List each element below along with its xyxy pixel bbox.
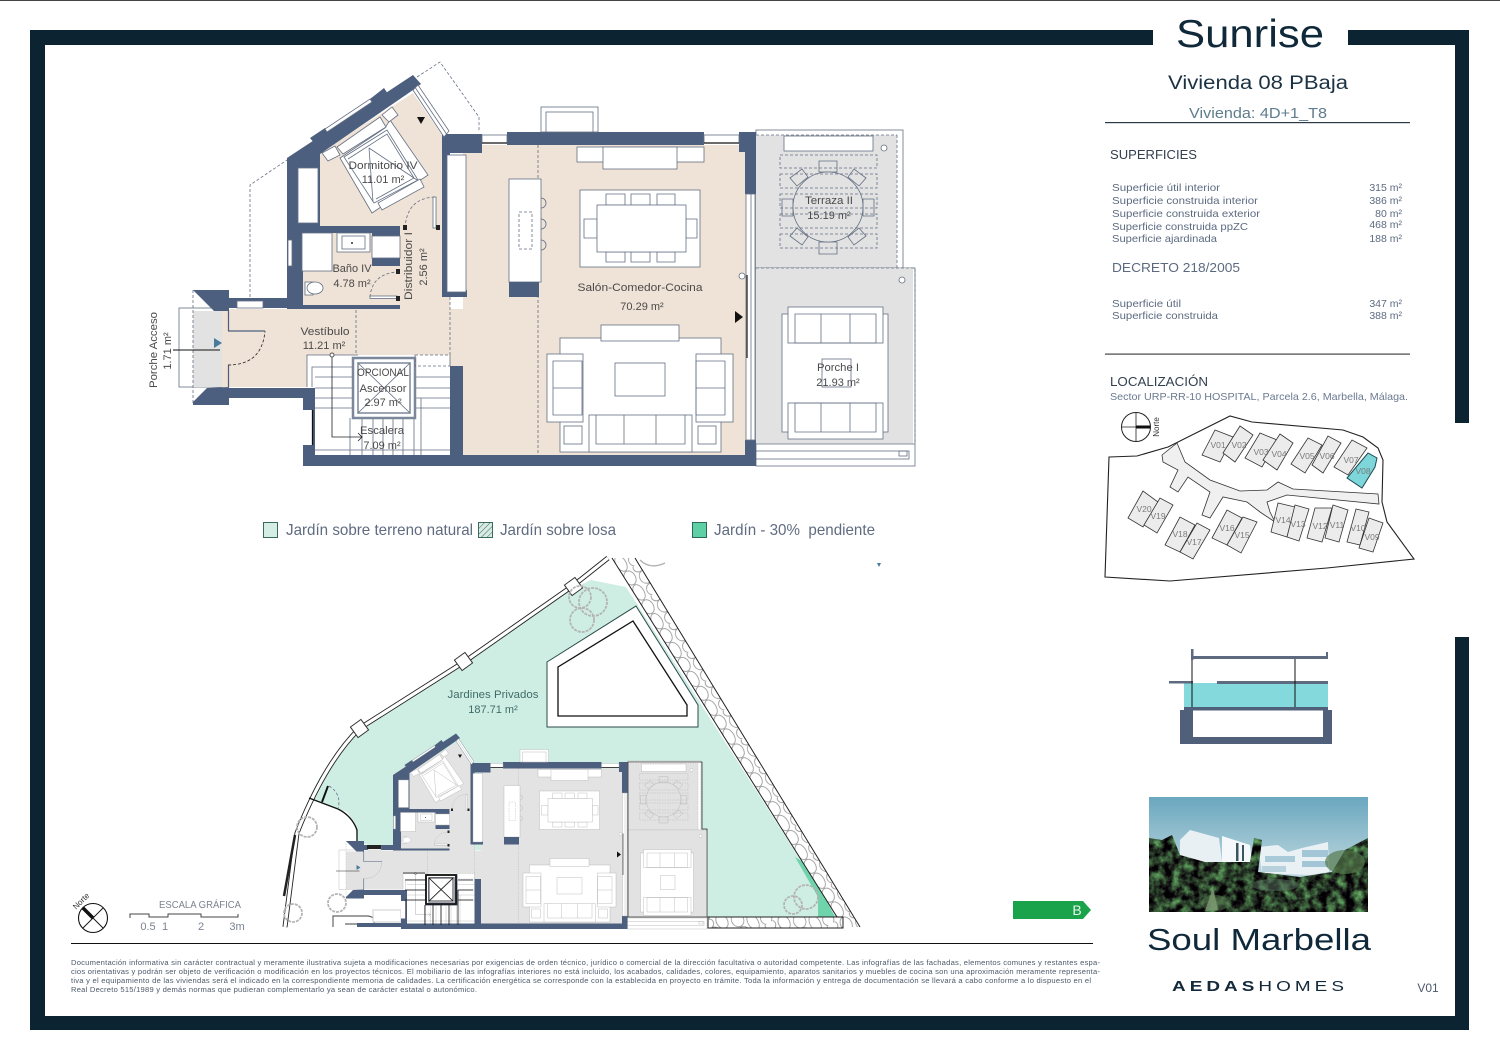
living room furniture — [547, 325, 733, 452]
bedroom bed — [322, 107, 428, 213]
row: superficie construida ppZC: Superficie construida ppZC — [1112, 221, 1248, 233]
kitchen — [509, 147, 704, 297]
heading: superficies: SUPERFICIES — [1110, 147, 1197, 162]
site labels: V08 — [1355, 466, 1371, 476]
label: escalera: 7.09 m² — [363, 440, 401, 452]
panel: localizacion text: Sector URP-RR-10 HOSPITAL, Parcela 2.6, Marbella, Málaga. — [1110, 391, 1408, 403]
label: ascensor: Ascensor — [360, 383, 407, 395]
site labels: V01 — [1210, 440, 1226, 450]
garden gate and curved path — [309, 786, 401, 927]
room labels — [148, 160, 860, 452]
site roads — [1162, 443, 1379, 522]
windows and wardrobes — [228, 85, 755, 445]
label: porche acceso: 1.71 m² — [162, 332, 174, 370]
project name: Soul Marbella: Soul Marbella — [1147, 922, 1372, 957]
label: salon comedor cocina: 70.29 m² — [620, 301, 664, 313]
stairs — [307, 353, 450, 455]
legend: jardin sobre losa: Jardín sobre losa — [500, 522, 616, 539]
label: ascensor: 2.97 m² — [364, 397, 402, 409]
graphic scale: 3m — [229, 921, 245, 933]
legal disclaimer: Documentación informativa sin carácter contractual y meramente ilustrativa sujeta a modificaciones necesarias por exigencias de orden técnico, jurídico o comercial de la dirección facultativa o autoridad competente. Las infografías de las fachadas, elementos comunes y restantes espa- — [71, 958, 1100, 967]
mini plan overlays — [357, 762, 707, 927]
graphic scale — [130, 898, 245, 933]
site labels: V10 — [1350, 523, 1366, 533]
label: porche I: Porche I — [817, 362, 859, 374]
orientation markers — [417, 117, 743, 323]
row: superficie util interior — [1112, 182, 1402, 194]
doors — [228, 197, 440, 365]
site buildings — [1128, 426, 1383, 559]
building section diagram — [1169, 649, 1332, 744]
row: superficie ajardinada — [1112, 233, 1402, 245]
label: ascensor — [357, 367, 409, 409]
perimeter wall — [284, 558, 608, 927]
row: superficie construida — [1112, 310, 1402, 322]
graphic scale: 1 — [162, 921, 168, 933]
legal disclaimer: tiva y el equipamiento de las viviendas será el indicado en la correspondiente memoria de calidades. La certificación energética se corresponde con la establecida en proyecto en trámite. Toda la información y entrega de documentación se llevará a cabo conforme a lo dispuesto en el — [71, 976, 1091, 985]
site labels: V09 — [1364, 532, 1380, 542]
label: terraza — [805, 195, 853, 222]
label: vestibulo: Vestíbulo — [300, 326, 350, 338]
label: distribuidor: 2.56 m² — [418, 248, 430, 286]
site labels: V13 — [1290, 519, 1306, 529]
site labels: V03 — [1253, 447, 1269, 457]
brand logo: AEDAS HOMES: AEDAS HOMES — [1172, 978, 1348, 995]
site labels: V12 — [1312, 521, 1328, 531]
graphic scale: ESCALA GRÁFICA — [159, 898, 241, 911]
panel: localizacion text: LOCALIZACIÓN — [1110, 374, 1208, 389]
label: terraza: Terraza II — [805, 195, 853, 207]
site location map — [1105, 412, 1414, 581]
porch furniture — [782, 307, 888, 439]
icon: north compass: Norte — [71, 891, 92, 911]
mini plan inside garden — [336, 727, 707, 929]
row: superficie construida exterior: Superficie construida exterior — [1112, 208, 1261, 220]
label: jardines privados: 187.71 m² — [468, 704, 518, 716]
garden trees — [284, 560, 818, 922]
row: superficie util — [1112, 298, 1402, 310]
row: superficie util: Superficie útil — [1112, 298, 1181, 310]
site boundary — [1105, 416, 1414, 581]
panel: superficies — [1110, 147, 1402, 322]
label: bano: 4.78 m² — [333, 278, 371, 290]
label: distribuidor — [403, 232, 430, 300]
energy rating arrow — [1013, 901, 1091, 919]
site labels: V07 — [1343, 455, 1359, 465]
walls — [193, 75, 756, 466]
photo palms — [1201, 850, 1365, 911]
site labels: V15 — [1234, 530, 1250, 540]
label: jardines privados — [448, 689, 539, 716]
small marker — [877, 563, 881, 567]
label: dormitorio: Dormitorio IV — [348, 160, 418, 172]
site labels: V02 — [1231, 440, 1247, 450]
row: superficie construida exterior — [1112, 208, 1402, 220]
label: bano — [332, 263, 372, 290]
graphic scale: 0.5 — [140, 921, 156, 933]
icon: north compass — [71, 891, 108, 932]
row: superficie util: 347 m² — [1369, 298, 1402, 310]
divider above legal text — [71, 943, 1093, 944]
label: vestibulo: 11.21 m² — [303, 340, 346, 352]
terrace furniture — [739, 136, 905, 283]
legend: jardin terreno natural: Jardín sobre terreno natural — [286, 522, 473, 539]
label: distribuidor: Distribuidor I — [403, 232, 415, 300]
site labels: V05 — [1299, 451, 1315, 461]
row: superficie construida: 388 m² — [1369, 310, 1402, 322]
row: superficie construida ppZC — [1112, 219, 1402, 233]
mini elevator — [403, 873, 473, 925]
heading: Vivienda 08 PBaja: Vivienda 08 PBaja — [1168, 73, 1348, 94]
site labels: V16 — [1219, 523, 1235, 533]
legal disclaimer — [71, 958, 1100, 994]
label: porche I — [816, 362, 860, 389]
heading: decreto: DECRETO 218/2005 — [1112, 260, 1240, 275]
icon: site compass: Norte — [1152, 417, 1161, 437]
panel: localizacion text — [1110, 374, 1408, 403]
site labels: V06 — [1319, 451, 1335, 461]
row: superficie construida: Superficie construida — [1112, 310, 1218, 322]
title: Sunrise: Sunrise — [1176, 13, 1324, 56]
label: escalera — [360, 425, 405, 452]
terraces — [756, 130, 915, 466]
graphic scale: 2 — [198, 921, 204, 933]
icon: site compass — [1122, 412, 1161, 442]
elevator — [353, 358, 415, 418]
site labels: V04 — [1271, 449, 1287, 459]
stone band — [612, 558, 860, 928]
garden lawn — [309, 580, 837, 917]
energy rating arrow: B — [1072, 902, 1082, 918]
row: superficie util interior: 315 m² — [1369, 182, 1402, 194]
row: superficie ajardinada: 188 m² — [1369, 233, 1402, 245]
legal disclaimer: Real Decreto 515/1989 y demás normas que pudieran complementarlo ya sean de carácter estatal o autonómico. — [71, 985, 477, 994]
dining table — [580, 190, 700, 267]
bathroom fixtures — [302, 233, 370, 295]
legend: jardin pendiente: Jardín - 30% pendiente — [714, 522, 875, 539]
row: superficie construida interior — [1112, 195, 1402, 207]
site labels: V11 — [1330, 520, 1345, 530]
site labels: V17 — [1186, 537, 1202, 547]
label: bano: Baño IV — [332, 263, 372, 275]
label: salon comedor cocina: Salón-Comedor-Cocina — [578, 282, 703, 294]
label: ascensor: OPCIONAL — [357, 367, 409, 379]
row: superficie util interior: Superficie útil interior — [1112, 182, 1221, 194]
divider under heading — [1105, 122, 1410, 123]
row: superficie construida interior: 386 m² — [1369, 195, 1402, 207]
label: salon comedor cocina — [578, 282, 703, 313]
label: vestibulo — [300, 326, 350, 352]
project render photo — [1149, 797, 1368, 912]
label: jardines privados: Jardines Privados — [448, 689, 539, 701]
row: superficie ajardinada: Superficie ajardinada — [1112, 233, 1217, 245]
interior floors — [222, 93, 746, 455]
dashed roof outline — [250, 62, 479, 297]
access porch — [173, 290, 222, 405]
divider above localizacion — [1105, 354, 1410, 355]
row: superficie construida interior: Superficie construida interior — [1112, 195, 1259, 207]
label: dormitorio: 11.01 m² — [362, 174, 405, 186]
row: superficie construida exterior: 80 m² — [1375, 208, 1402, 220]
site garden plan — [284, 558, 881, 928]
label: porche I: 21.93 m² — [816, 377, 860, 389]
site labels: V20 — [1136, 504, 1152, 514]
label: porche acceso: Porche Acceso — [148, 312, 160, 388]
legal disclaimer: cios orientativas y podrán ser objeto de verificación o modificación en los proyectos técnicos. El mobiliario de las infografías interiores no está incluido, los acabados, calidades, colores, equipamiento, aparatos sanitarios y muebles de cocina son una aproximación meramente representa- — [71, 967, 1100, 976]
sloped garden strip — [795, 857, 835, 917]
site labels: V14 — [1275, 515, 1291, 525]
label: terraza: 15.19 m² — [807, 210, 851, 222]
label: porche acceso — [148, 312, 174, 388]
photo foliage — [1149, 835, 1368, 912]
row: superficie construida ppZC: 468 m² — [1369, 219, 1402, 231]
label: dormitorio — [348, 160, 418, 186]
site labels: V18 — [1172, 529, 1188, 539]
site labels — [1136, 440, 1380, 547]
photo buildings — [1180, 830, 1329, 875]
highlighted home V08 — [1347, 453, 1377, 488]
site labels: V19 — [1150, 511, 1166, 521]
legend — [264, 522, 875, 539]
version label: V01 — [1417, 981, 1439, 995]
label: escalera: Escalera — [360, 425, 405, 437]
pool — [547, 606, 698, 727]
subheading: tipo de vivienda: Vivienda: 4D+1_T8 — [1189, 105, 1327, 122]
floor plan — [173, 62, 915, 466]
dashed zone limits — [356, 145, 538, 455]
